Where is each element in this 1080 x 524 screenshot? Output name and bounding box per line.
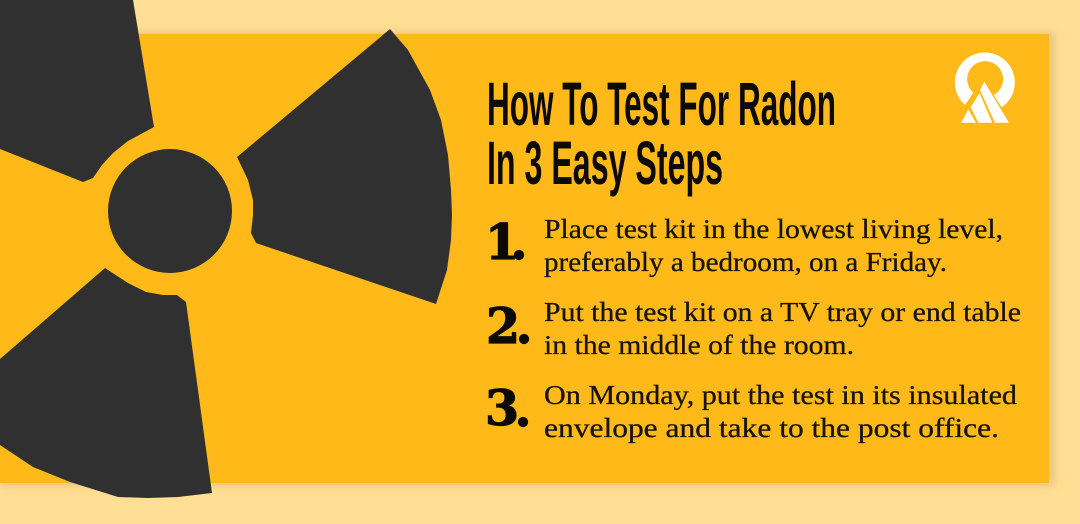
icon: logo <box>955 52 1015 123</box>
step 2 <box>486 296 1021 360</box>
title: In 3 Easy Steps <box>487 129 723 197</box>
icon: radiation symbol <box>0 0 452 498</box>
step 1 <box>485 213 1003 277</box>
step 1 number: . <box>510 213 528 271</box>
step 1 text: preferably a bedroom, on a Friday. <box>544 246 947 277</box>
radiation blade top-left <box>0 0 154 182</box>
radiation centre circle <box>108 149 232 273</box>
step 3 text: On Monday, put the test in its insulated <box>544 379 1017 410</box>
step 3 number: . <box>514 380 532 438</box>
title <box>487 70 836 197</box>
radiation blade bottom-left <box>0 268 212 498</box>
step 2 text: in the middle of the room. <box>544 329 854 360</box>
step 1 text: Place test kit in the lowest living level, <box>544 213 1003 244</box>
step 1 number: 1 <box>485 213 519 271</box>
step 3 text: envelope and take to the post office. <box>544 412 999 443</box>
step 2 number: 2 <box>486 297 520 355</box>
step 3 <box>485 379 1017 443</box>
step 1 text <box>544 213 1003 277</box>
radiation blade right <box>237 29 452 304</box>
step 3 text <box>544 379 1017 443</box>
step 2 text: Put the test kit on a TV tray or end table <box>544 296 1021 327</box>
step 2 number: . <box>516 297 533 355</box>
step 3 number: 3 <box>485 379 519 437</box>
step 2 text <box>544 296 1021 360</box>
